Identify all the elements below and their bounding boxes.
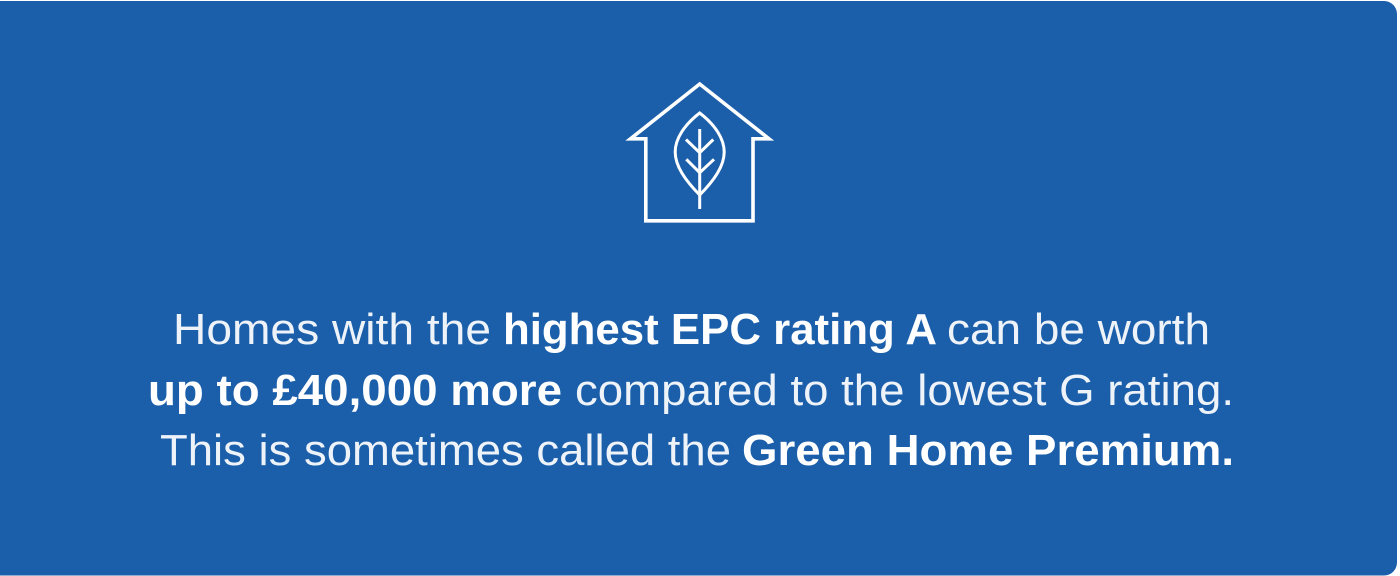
text block: Green Home Premium message: up to £40,000 more — [148, 366, 562, 415]
text block: Green Home Premium message: Homes with the — [173, 305, 491, 354]
text block: Green Home Premium message: This is sometimes called the — [160, 426, 731, 475]
icon: house with leaf — [630, 84, 769, 221]
text block: Green Home Premium message: highest EPC rating A — [503, 305, 937, 354]
text block: Green Home Premium message: compared to the lowest G rating. — [575, 366, 1234, 415]
text block: Green Home Premium message: Green Home Premium. — [742, 426, 1234, 475]
text block: Green Home Premium message — [148, 305, 1234, 475]
text block: Green Home Premium message: can be worth — [947, 305, 1210, 354]
